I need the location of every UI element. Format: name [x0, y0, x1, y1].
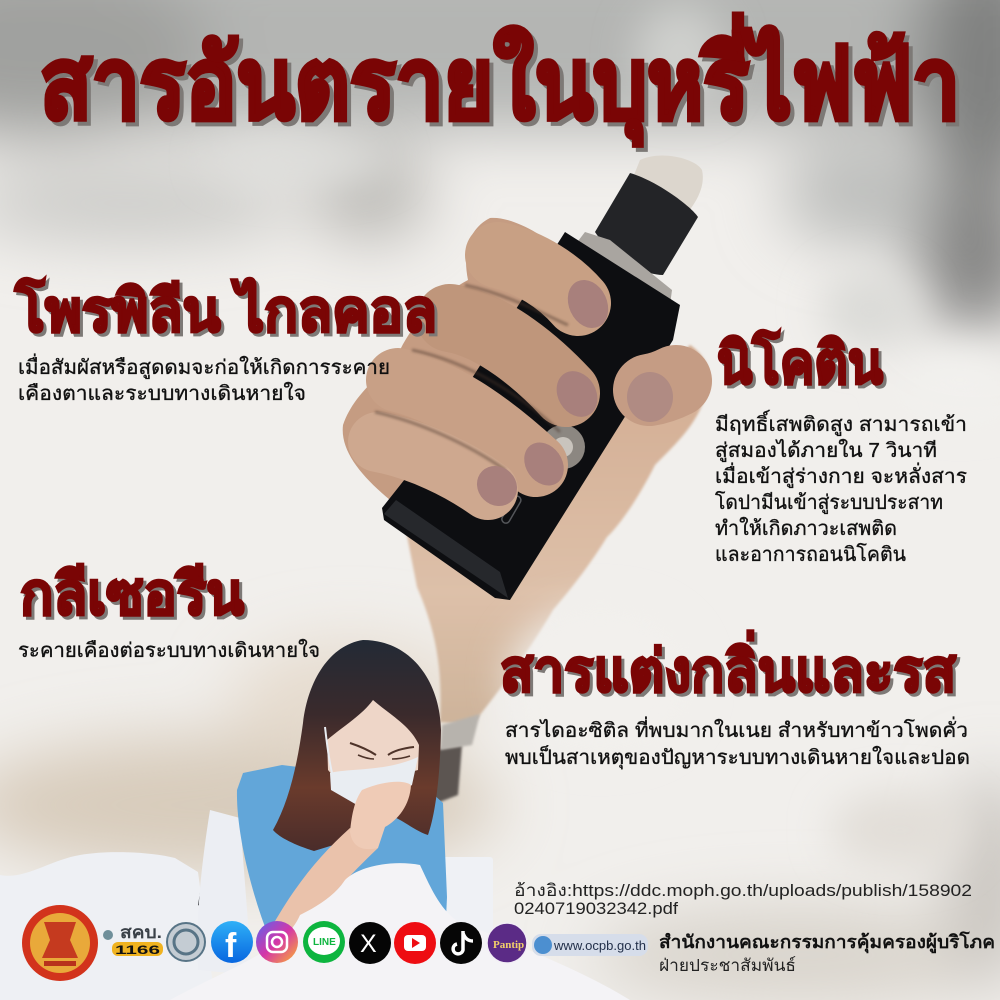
silver gear: [575, 232, 672, 305]
forearm: [270, 828, 378, 945]
fingers: [378, 255, 676, 490]
text: nicotine description: สู่สมองได้ภายใน 7 วินาที: [715, 439, 937, 463]
text: nicotine description: [715, 409, 967, 566]
panel: glycerin: [18, 562, 320, 662]
text: flavourings description: [505, 716, 970, 770]
text: propylene glycol description: เคืองตาและระบบทางเดินหายใจ: [18, 382, 306, 405]
organisation name: สำนักงานคณะกรรมการคุ้มครองผู้บริโภค: [659, 931, 995, 954]
text: nicotine description: โดปามีนเข้าสู่ระบบประสาท: [715, 491, 943, 515]
heading: nicotine: นิโคติน: [720, 331, 886, 399]
panel: propylene glycol: [14, 276, 440, 405]
mouthpiece: [628, 155, 703, 222]
side wheel: [541, 425, 585, 469]
website pill: www.ocpb.go.th: [553, 938, 646, 953]
panel: flavourings: [500, 630, 970, 770]
heading: propylene glycol: โพรพิลีน ไกลคอล: [14, 276, 437, 344]
text: flavourings description: พบเป็นสาเหตุของปัญหาระบบทางเดินหายใจและปอด: [505, 744, 970, 770]
text: nicotine description: ทำให้เกิดภาวะเสพติด: [715, 517, 897, 540]
heading: flavourings: สารแต่งกลิ่นและรส: [503, 633, 960, 707]
reference citation: [514, 881, 972, 918]
text: propylene glycol description: เมื่อสัมผัสหรือสูดดมจะก่อให้เกิดการระคาย: [18, 353, 390, 380]
icon: hotline 1166: สคบ.: [120, 923, 162, 942]
text: propylene glycol description: [18, 353, 390, 405]
heading: glycerin: กลีเซอรีน: [20, 562, 244, 627]
neck and chest: [325, 780, 395, 850]
icon: tiktok: [440, 922, 482, 964]
icon: line: LINE: [313, 937, 336, 948]
text: nicotine description: มีฤทธิ์เสพติดสูง สามารถเข้า: [715, 409, 967, 437]
icon: line: [303, 921, 345, 963]
reference citation: 0240719032342.pdf: [514, 899, 678, 918]
face: [327, 700, 419, 790]
organisation name: ฝ่ายประชาสัมพันธ์: [659, 956, 796, 975]
mask strap: [325, 727, 332, 773]
icon: instagram: [256, 921, 298, 963]
palm and wrist: [400, 345, 710, 725]
bedhead shadow: [198, 862, 205, 910]
website pill: [532, 934, 648, 956]
finger creases: [375, 285, 568, 470]
text: flavourings description: สารไดอะซิติล ที่พบมากในเนย สำหรับทาข้าวโพดคั่ว: [505, 716, 968, 742]
back of hand: [343, 218, 610, 510]
icon: agency seal: [22, 905, 98, 981]
usb port: [500, 495, 522, 525]
organisation name: [659, 931, 995, 975]
right pillow: [440, 857, 493, 967]
device body: [382, 232, 680, 600]
text: nicotine description: และอาการถอนนิโคติน: [715, 543, 906, 566]
watch strap: [432, 745, 462, 805]
eyes: [350, 743, 414, 755]
duvet: [170, 863, 630, 1000]
icon: x: X: [360, 930, 377, 958]
patient woman: [0, 640, 630, 1000]
icon: hotline 1166: 1166: [115, 943, 161, 957]
icon: consumer board: [167, 923, 205, 961]
face mask: [330, 757, 418, 805]
text: nicotine description: เมื่อเข้าสู่ร่างกาย จะหลั่งสาร: [715, 462, 967, 489]
heading: glycerin: กลีเซอรีน: [23, 565, 247, 630]
icon: pantip: [487, 923, 527, 963]
icon: pantip: Pantip: [493, 939, 524, 951]
sweater: [237, 765, 447, 945]
panel: nicotine: [715, 328, 967, 566]
heading: flavourings: สารแต่งกลิ่นและรส: [500, 630, 957, 704]
bed sheets: [0, 852, 215, 1000]
hair back: [273, 640, 441, 851]
text: glycerin description: ระคายเคืองต่อระบบทางเดินหายใจ: [18, 639, 320, 662]
heading: nicotine: นิโคติน: [717, 328, 883, 396]
pillow: [197, 810, 252, 975]
heading: propylene glycol: โพรพิลีน ไกลคอล: [17, 279, 440, 347]
atomizer tank: [595, 173, 698, 275]
icon: hotline 1166: [103, 923, 163, 957]
reference citation: อ้างอิง:https://ddc.moph.go.th/uploads/publish/158902: [514, 881, 972, 900]
logo row: [22, 905, 648, 981]
fingernails: [469, 273, 673, 514]
icon: youtube: [394, 922, 436, 964]
smoke over wrist: [510, 610, 690, 750]
icon: facebook: f: [225, 927, 237, 965]
icon: x: [349, 922, 391, 964]
coughing hand: [350, 782, 411, 849]
vape and hand illustration: [343, 155, 710, 805]
icon: facebook: [211, 921, 253, 965]
